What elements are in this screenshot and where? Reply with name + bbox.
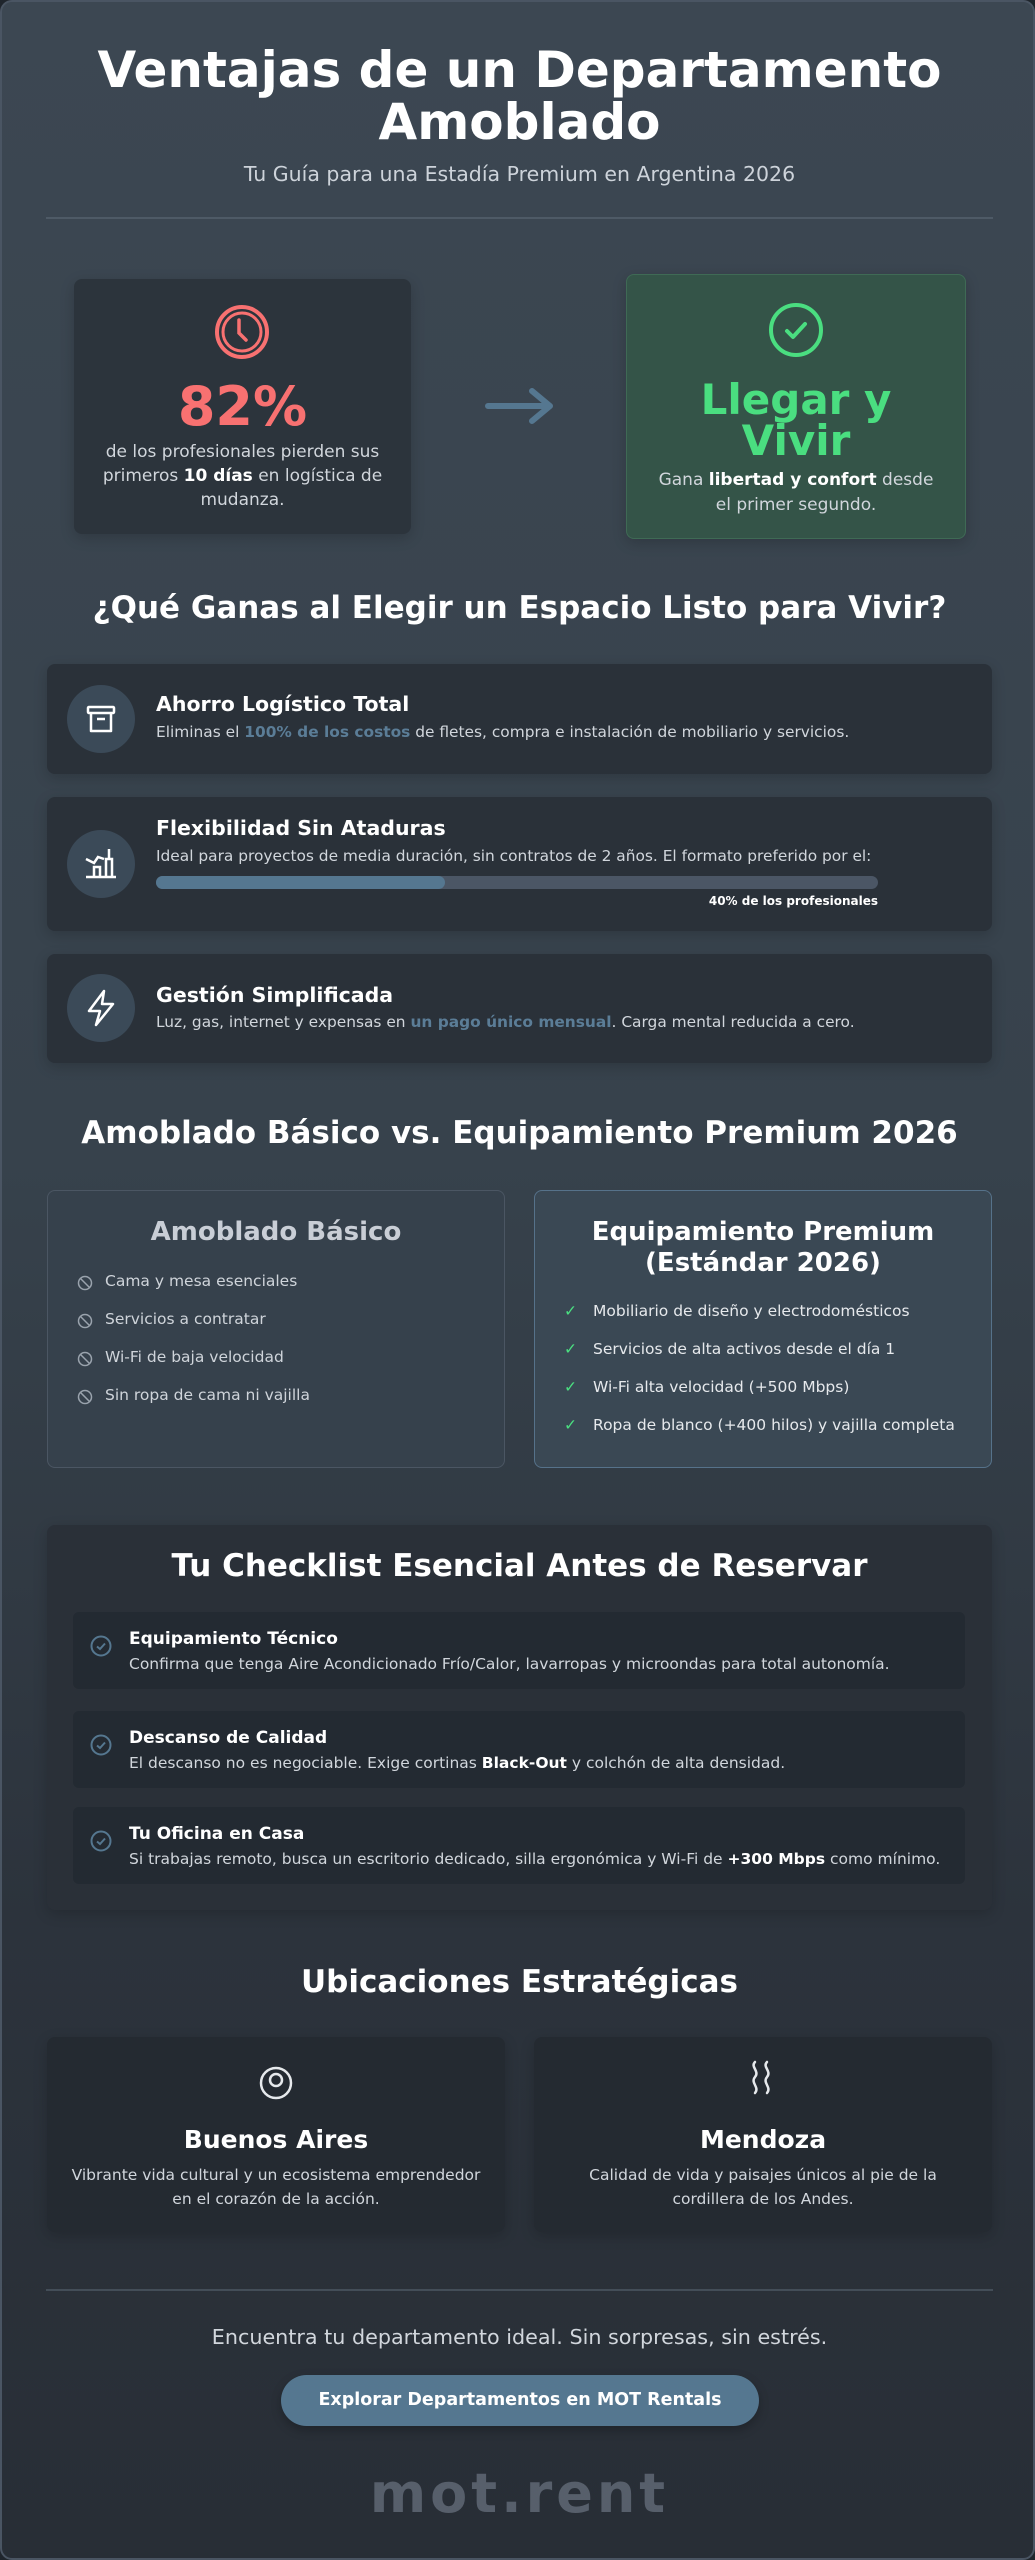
panel: Mendoza (534, 2037, 992, 2232)
icon: pin (260, 2066, 292, 2100)
list: premium items: ✓ (564, 1302, 577, 1320)
panel: benefit 2 (47, 797, 992, 931)
stat description: de los profesionales pierden sus primeros 10 días en logística de mudanza. (103, 442, 382, 510)
list: premium items: Wi-Fi alta velocidad (+500 Mbps) (593, 1378, 849, 1396)
panel: basic: Amoblado Básico (151, 1217, 401, 1247)
list: premium items: ✓ (564, 1378, 577, 1396)
solution heading: Vivir (742, 416, 850, 465)
title: Amoblado (379, 93, 660, 151)
panel: basic (47, 1190, 505, 1468)
checklist item 1: Confirma que tenga Aire Acondicionado Frío/Calor, lavarropas y microondas para total autonomía. (129, 1655, 890, 1673)
panel: benefit 1: Eliminas el 100% de los costos de fletes, compra e instalación de mobiliario y servicios. (156, 723, 849, 741)
list: basic items: Wi-Fi de baja velocidad (105, 1348, 284, 1366)
footer tagline: Encuentra tu departamento ideal. Sin sorpresas, sin estrés. (212, 2325, 827, 2349)
panel: Mendoza: Calidad de vida y paisajes únicos al pie de la cordillera de los Andes. (589, 2166, 937, 2208)
checklist item 2: Descanso de Calidad (129, 1728, 327, 1748)
list: premium items: ✓ (564, 1340, 577, 1358)
panel: benefit 3 (47, 954, 992, 1063)
panel: premium: Equipamiento Premium (592, 1217, 934, 1247)
bar label: 40% de los profesionales (709, 894, 878, 908)
checklist item 1 (73, 1612, 965, 1689)
panel: premium: (Estándar 2026) (645, 1248, 881, 1278)
panel: Buenos Aires (47, 2037, 505, 2232)
panel: benefit 1: Ahorro Logístico Total (156, 692, 409, 716)
panel: benefit 3: Gestión Simplificada (156, 983, 393, 1007)
stat: 82%: 82% (178, 375, 307, 438)
checklist item 1: Equipamiento Técnico (129, 1629, 338, 1649)
solution heading: Llegar y (701, 375, 891, 424)
panel: benefit 2: Flexibilidad Sin Ataduras (156, 816, 446, 840)
panel: Buenos Aires: Buenos Aires (184, 2125, 368, 2154)
heading: benefits: ¿Qué Ganas al Elegir un Espacio Listo para Vivir? (93, 590, 946, 626)
heading: locations: Ubicaciones Estratégicas (301, 1964, 738, 2000)
list: basic items: Servicios a contratar (105, 1310, 266, 1328)
subtitle: Tu Guía para una Estadía Premium en Argentina 2026 (244, 162, 795, 186)
icon: archive (67, 685, 135, 753)
panel: benefit 3: Luz, gas, internet y expensas en un pago único mensual. Carga mental reducida a cero. (156, 1013, 855, 1031)
icon: clock (215, 305, 269, 359)
panel: Mendoza: Mendoza (700, 2125, 826, 2154)
solution description: Gana libertad y confort desde el primer segundo. (659, 470, 933, 515)
heading: checklist: Tu Checklist Esencial Antes de Reservar (171, 1548, 868, 1584)
checklist item 3: Si trabajas remoto, busca un escritorio dedicado, silla ergonómica y Wi-Fi de +300 Mbps como mínimo. (129, 1850, 940, 1868)
panel: benefit 1 (47, 664, 992, 774)
list: premium items: Mobiliario de diseño y electrodomésticos (593, 1302, 910, 1320)
arrow (485, 388, 553, 424)
solution heading (701, 375, 891, 465)
list: basic items: Cama y mesa esenciales (105, 1272, 297, 1290)
button: CTA: Explorar Departamentos en MOT Rentals (318, 2390, 722, 2410)
list: premium items: ✓ (564, 1416, 577, 1434)
panel: checklist (47, 1525, 992, 1910)
title (98, 41, 941, 151)
list: premium items (564, 1302, 955, 1434)
progress bar: 40% (156, 876, 878, 889)
panel: benefit 2: Ideal para proyectos de media duración, sin contratos de 2 años. El formato preferido por el: (156, 847, 871, 865)
panel: problem stat (74, 279, 411, 534)
icon: chart (67, 830, 135, 898)
checklist item 2 (73, 1711, 965, 1788)
panel: solution (626, 274, 966, 539)
logo: mot.rent: mot.rent (370, 2462, 669, 2525)
checklist item 3: Tu Oficina en Casa (129, 1824, 304, 1844)
panel: Buenos Aires: Vibrante vida cultural y un ecosistema emprendedor en el corazón de la acción. (72, 2166, 480, 2208)
panel: premium (534, 1190, 992, 1468)
checklist item 2: El descanso no es negociable. Exige cortinas Black-Out y colchón de alta densidad. (129, 1754, 785, 1772)
icon: check circle (769, 303, 823, 357)
heading: comparison: Amoblado Básico vs. Equipamiento Premium 2026 (81, 1115, 958, 1151)
button: CTA (281, 2375, 759, 2426)
icon: lightning (67, 974, 135, 1042)
list: premium items: Ropa de blanco (+400 hilos) y vajilla completa (593, 1416, 955, 1434)
list: basic items: Sin ropa de cama ni vajilla (105, 1386, 310, 1404)
icon: waves (752, 2060, 770, 2094)
list: basic items (78, 1272, 310, 1404)
checklist item 3 (73, 1807, 965, 1884)
list: premium items: Servicios de alta activos desde el día 1 (593, 1340, 895, 1358)
title: Ventajas de un Departamento (98, 41, 941, 99)
